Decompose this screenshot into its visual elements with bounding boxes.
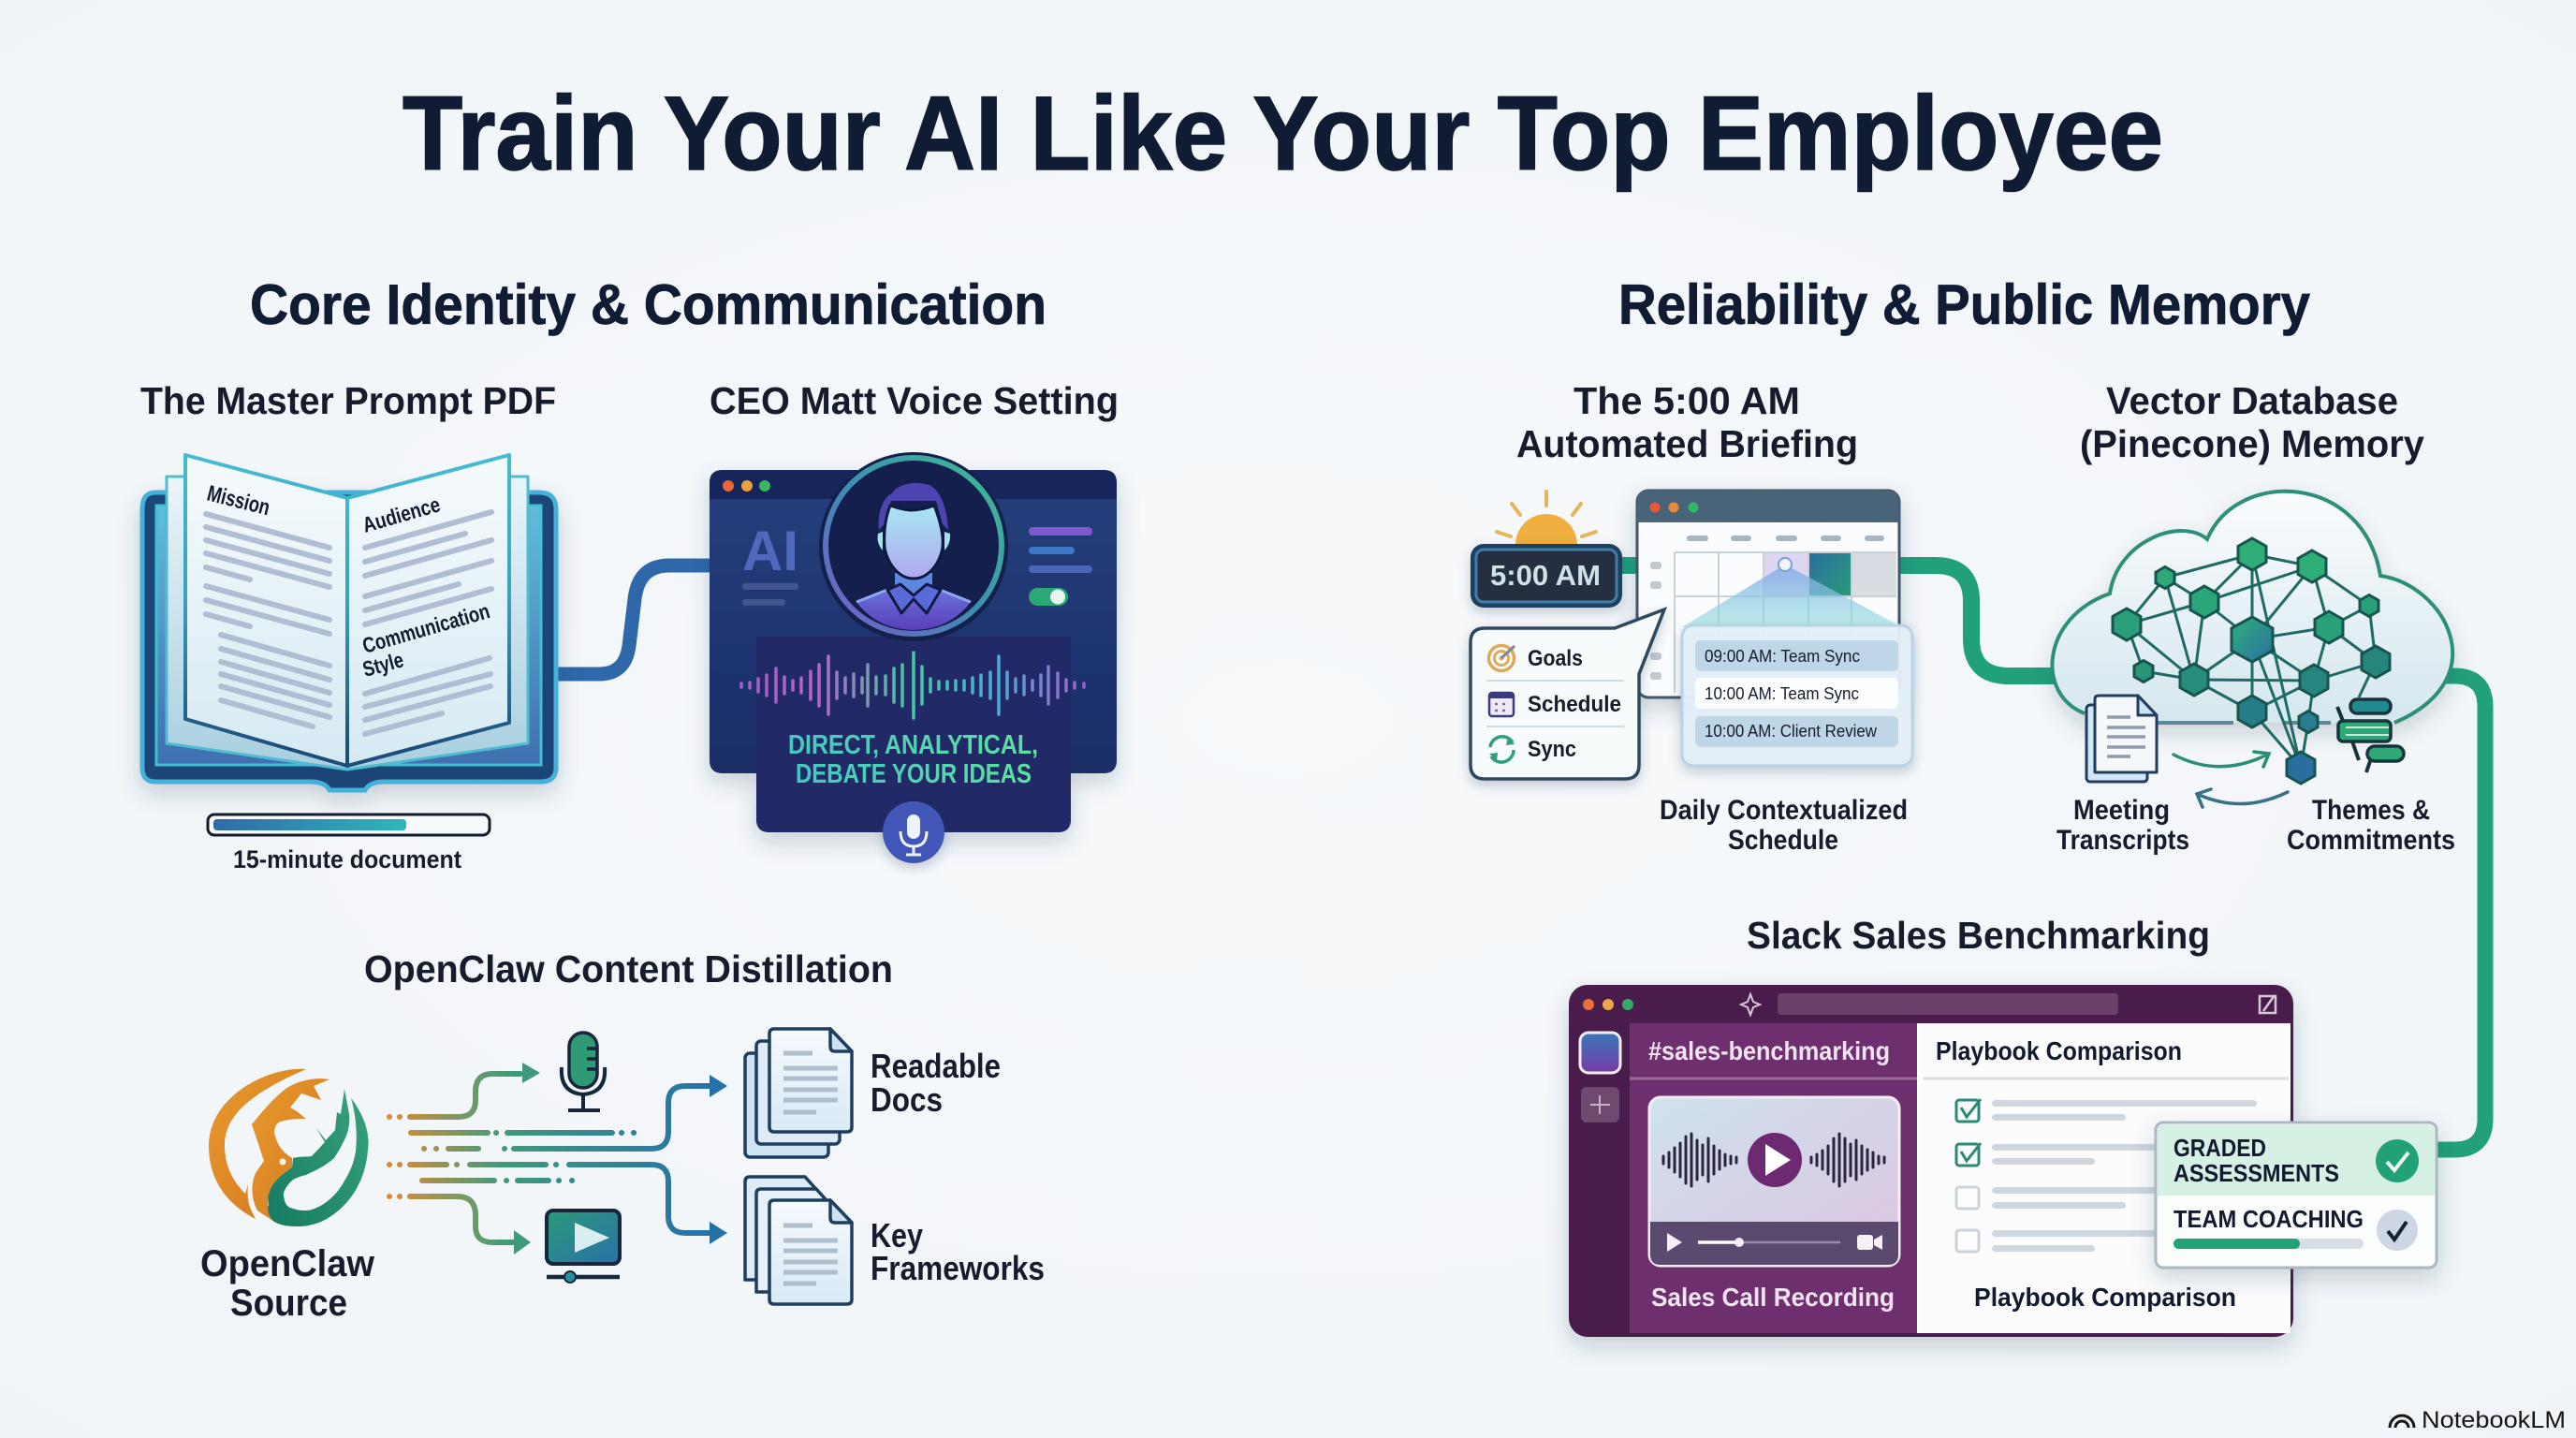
window frame bbox=[1637, 491, 1899, 697]
stream: middle lower bbox=[422, 1178, 572, 1183]
highlighted cells bbox=[1764, 553, 1896, 596]
network edges bbox=[2127, 554, 2376, 768]
heading: briefing bbox=[1516, 379, 1858, 465]
book cover bbox=[142, 492, 556, 790]
graded assessments text: ASSESSMENTS bbox=[2174, 1159, 2339, 1187]
back pages bbox=[167, 477, 528, 770]
front left page bbox=[185, 455, 347, 766]
label: audience: Audience bbox=[359, 492, 443, 537]
arrows: sync between transcripts and themes bbox=[2174, 752, 2288, 807]
search bar bbox=[1778, 993, 2118, 1015]
highlight beam bbox=[1682, 565, 1902, 627]
icon: sparkle bbox=[1741, 994, 1760, 1015]
front right page bbox=[347, 455, 509, 766]
top band bbox=[710, 470, 1117, 499]
schedule row 3 bbox=[1695, 716, 1898, 747]
heading: slack benchmarking: Slack Sales Benchmarking bbox=[1747, 914, 2210, 957]
cloud fill bbox=[2052, 492, 2452, 723]
coaching progress bbox=[2174, 1239, 2364, 1249]
section heading: core identity: Core Identity & Communication bbox=[250, 273, 1046, 336]
arrow: clock to calendar to cloud bbox=[1615, 565, 2064, 676]
avatar bbox=[1580, 1033, 1620, 1073]
panel: vector memory cloud bbox=[2052, 492, 2452, 807]
day headers bbox=[1687, 536, 1884, 541]
panel: calendar window bbox=[1637, 491, 1902, 697]
settings bars bbox=[1029, 527, 1092, 573]
voice waveform bbox=[741, 653, 1084, 718]
label: key frameworks: Frameworks bbox=[871, 1249, 1045, 1287]
title: Train Your AI Like Your Top Employee bbox=[402, 75, 2163, 192]
toggle bbox=[1029, 588, 1068, 606]
green header bbox=[2158, 1124, 2435, 1196]
arrow: to readable docs bbox=[424, 1075, 727, 1149]
voice description: DIRECT, ANALYTICAL, bbox=[788, 730, 1038, 760]
checklist bbox=[1956, 1099, 2257, 1252]
panel: assessment card bbox=[2156, 1123, 2437, 1268]
label: openclaw source: OpenClaw bbox=[200, 1243, 375, 1284]
icon: calendar bbox=[1489, 693, 1514, 716]
schedule row 2 bbox=[1695, 678, 1898, 709]
icon: video player bbox=[547, 1211, 620, 1283]
window dots bbox=[1583, 999, 1633, 1010]
sales call player bbox=[1649, 1097, 1899, 1266]
arrow: to video bbox=[389, 1196, 531, 1255]
icon: compose bbox=[2260, 995, 2276, 1013]
player controls bbox=[1667, 1233, 1882, 1252]
window dots bbox=[723, 480, 770, 492]
label: daily schedule bbox=[1660, 795, 1908, 856]
label: sales call recording: Sales Call Recording bbox=[1651, 1283, 1895, 1312]
progress bar bbox=[208, 814, 490, 835]
graded assessments text bbox=[2174, 1134, 2339, 1187]
icon: microphone bbox=[562, 1033, 605, 1110]
icon: microphone button bbox=[883, 801, 944, 863]
icon: key frameworks stack bbox=[745, 1177, 852, 1304]
label: meeting transcripts bbox=[2056, 795, 2189, 856]
voice description bbox=[788, 730, 1038, 789]
white content bbox=[1917, 1023, 2291, 1333]
window dots bbox=[1649, 502, 1698, 513]
progress label: 15-minute document bbox=[233, 845, 461, 873]
sync text: Sync bbox=[1528, 737, 1576, 762]
calendar grid bbox=[1675, 552, 1896, 693]
label: style: Style bbox=[360, 647, 406, 682]
label: daily schedule: Schedule bbox=[1728, 825, 1838, 856]
heading: master prompt: The Master Prompt PDF bbox=[140, 379, 556, 422]
clock badge bbox=[1471, 544, 1622, 608]
label: themes and commitments: Commitments bbox=[2287, 825, 2455, 856]
avatar bbox=[819, 452, 1008, 641]
label: key frameworks bbox=[871, 1216, 1045, 1287]
pin bbox=[1778, 558, 1792, 571]
label: openclaw source bbox=[200, 1243, 375, 1324]
AI letters: AI bbox=[742, 520, 798, 582]
flow lines bbox=[389, 1063, 727, 1255]
arrow: to microphone bbox=[389, 1063, 540, 1117]
dividers bbox=[1486, 681, 1624, 726]
icon: green check bbox=[2376, 1139, 2419, 1182]
heading: openclaw: OpenClaw Content Distillation bbox=[364, 947, 893, 990]
play button bbox=[1748, 1133, 1802, 1187]
schedule text: Schedule bbox=[1528, 692, 1621, 717]
channel name: #sales-benchmarking bbox=[1648, 1036, 1890, 1065]
stream: middle upper bbox=[411, 1130, 634, 1136]
add button bbox=[1581, 1087, 1619, 1123]
icon: target bbox=[1488, 646, 1515, 670]
heading: briefing: The 5:00 AM bbox=[1573, 379, 1800, 422]
heading: vector database: Vector Database bbox=[2106, 379, 2398, 422]
cloud outline bbox=[2052, 492, 2452, 723]
panel: daily schedule card bbox=[1682, 625, 1912, 766]
left page lines bbox=[206, 514, 329, 726]
arrow: cloud to slack panel bbox=[2429, 676, 2485, 1150]
icon: sun bbox=[1497, 492, 1596, 545]
label: communication: Communication bbox=[359, 598, 492, 658]
goals text: Goals bbox=[1528, 646, 1583, 671]
label: meeting transcripts: Transcripts bbox=[2056, 825, 2189, 856]
right page lines bbox=[365, 512, 491, 734]
graded assessments text: GRADED bbox=[2174, 1134, 2266, 1162]
time markers bbox=[1650, 562, 1661, 680]
label: daily schedule: Daily Contextualized bbox=[1660, 795, 1908, 826]
label: themes and commitments bbox=[2287, 795, 2455, 856]
watermark: notebooklm: NotebookLM bbox=[2422, 1407, 2566, 1433]
label: mission: Mission bbox=[205, 481, 272, 521]
heading: vector database: (Pinecone) Memory bbox=[2080, 422, 2424, 465]
base line bbox=[2158, 721, 2331, 725]
schedule row 2: 10:00 AM: Team Sync bbox=[1705, 683, 1859, 703]
icon: readable docs stack bbox=[745, 1029, 852, 1157]
label: playbook comparison: Playbook Comparison bbox=[1974, 1283, 2236, 1312]
lower darker inset bbox=[756, 637, 1071, 832]
panel: slack window bbox=[1569, 985, 2293, 1337]
icon: chat commitments bbox=[2337, 699, 2404, 772]
network nodes bbox=[2113, 538, 2390, 784]
panel: voice setting screen bbox=[710, 452, 1117, 863]
section heading: reliability: Reliability & Public Memory bbox=[1618, 273, 2311, 336]
heading: briefing: Automated Briefing bbox=[1516, 422, 1858, 465]
arrow: to key frameworks bbox=[389, 1165, 727, 1244]
icon: gray check bbox=[2377, 1210, 2418, 1251]
schedule row 1 bbox=[1695, 640, 1898, 671]
left lines bbox=[742, 583, 798, 606]
label: openclaw source: Source bbox=[230, 1283, 347, 1324]
team coaching text: TEAM COACHING bbox=[2174, 1205, 2364, 1233]
panel: goals callout bbox=[1471, 609, 1664, 779]
clock time: 5:00 AM bbox=[1490, 559, 1601, 592]
icon: sync bbox=[1489, 737, 1515, 762]
header dividers bbox=[1630, 1077, 1917, 1080]
label: key frameworks: Key bbox=[871, 1216, 923, 1255]
heading: voice setting: CEO Matt Voice Setting bbox=[710, 379, 1119, 422]
label: meeting transcripts: Meeting bbox=[2073, 795, 2170, 826]
label: readable docs bbox=[871, 1047, 1001, 1119]
icon: openclaw logo bbox=[209, 1069, 369, 1226]
schedule row 3: 10:00 AM: Client Review bbox=[1705, 721, 1878, 741]
panel: open book bbox=[142, 455, 556, 790]
label: readable docs: Readable bbox=[871, 1047, 1001, 1085]
player waveform bbox=[1663, 1134, 1884, 1186]
window frame bbox=[1569, 985, 2293, 1337]
heading: vector database bbox=[2080, 379, 2424, 465]
sidebar bbox=[1630, 1023, 1917, 1333]
label: themes and commitments: Themes & bbox=[2312, 795, 2430, 826]
icon: transcript document bbox=[2086, 696, 2157, 782]
schedule row 1: 09:00 AM: Team Sync bbox=[1705, 646, 1860, 666]
arrow: book to voice connector bbox=[548, 565, 721, 674]
label: readable docs: Docs bbox=[871, 1080, 943, 1119]
screen body bbox=[710, 470, 1117, 832]
playbook header: Playbook Comparison bbox=[1936, 1036, 2182, 1065]
voice description: DEBATE YOUR IDEAS bbox=[796, 759, 1032, 789]
